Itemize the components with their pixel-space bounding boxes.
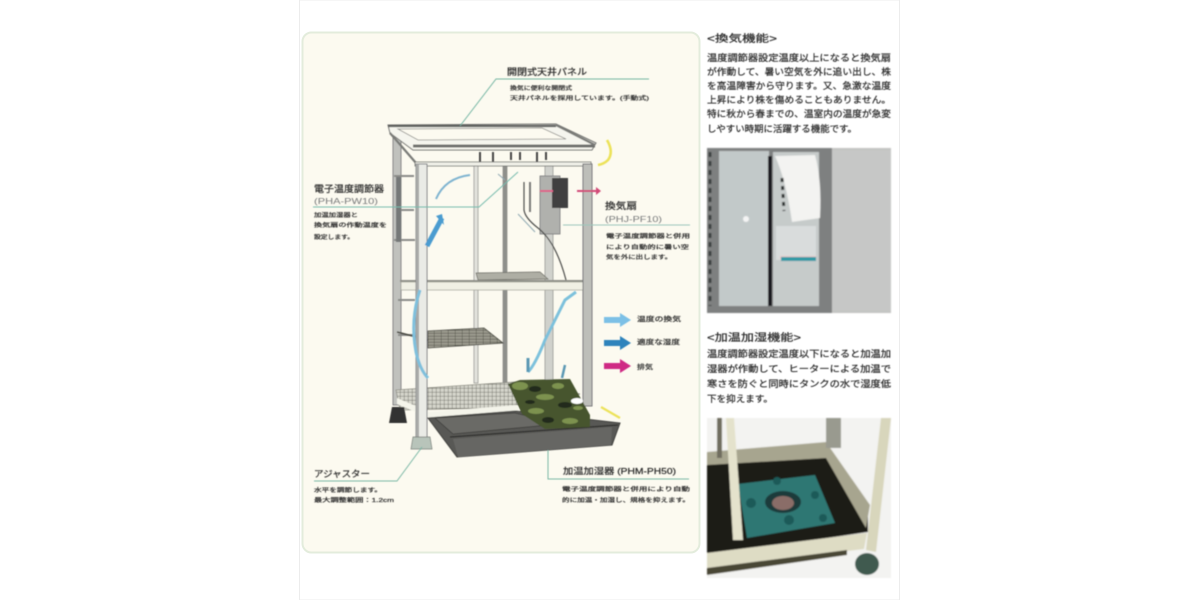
roof hinges and wiring <box>480 152 546 162</box>
legend: airflow arrows <box>604 313 682 373</box>
lower wire shelf <box>428 328 503 348</box>
text block: ventilation description: を高温障害から守ります。又、急激な温度 <box>707 80 891 91</box>
middle shelf <box>476 272 548 280</box>
legend: airflow arrows: 温度の換気 <box>637 314 682 323</box>
callout: ceiling panel: 換気に便利な開閉式 <box>510 84 573 92</box>
panel: diagram background <box>302 32 700 552</box>
callout: heater humidifier: 電子温度調節器と併用により自動 <box>562 485 691 493</box>
front adjuster foot <box>411 437 432 449</box>
side panel ribs <box>394 176 415 335</box>
callout: adjuster: 最大調整範囲：1.2cm <box>314 496 395 504</box>
callout: ventilation fan: 気を外に出します。 <box>606 253 672 261</box>
text block: heating description: 寒さを防ぐと同時にタンクの水で湿度低 <box>707 378 891 389</box>
legend: airflow arrows: 適度な湿度 <box>637 337 681 346</box>
back frame posts <box>474 165 553 383</box>
text block: ventilation description: 上昇により株を傷めることもありません。 <box>707 94 891 105</box>
text block: ventilation description: 特に秋から春までの、温室内の温度が急変 <box>707 108 891 119</box>
text block: ventilation description <box>707 52 891 134</box>
legend: airflow arrows: 排気 <box>637 362 654 371</box>
blue airflow curves <box>414 174 576 378</box>
callout: ventilation fan: により自動的に暑い空 <box>606 243 690 251</box>
callout: heater humidifier: 加温加湿器 (PHM-PH50) <box>563 466 676 476</box>
text block: heating description <box>707 348 891 404</box>
bottom mesh shelf <box>396 382 580 410</box>
tray <box>428 411 620 457</box>
callout: ventilation fan <box>605 200 690 261</box>
callout: ceiling panel: 開閉式天井パネル <box>507 66 587 77</box>
callout: ventilation fan: 電子温度調節器と併用 <box>606 232 690 240</box>
back left post <box>393 130 401 405</box>
callout: adjuster: アジャスター <box>314 469 370 479</box>
front right post <box>583 164 592 406</box>
arrow: exhaust <box>604 359 631 373</box>
callout: electronic temperature controller: (PHA-PW10) <box>314 196 378 206</box>
top front beam <box>415 162 591 166</box>
text block: heating description: 温度調節器設定温度以下になると加温加 <box>707 348 891 359</box>
ventilation fan unit <box>524 176 601 280</box>
callout: electronic temperature controller: 加温加湿器と <box>314 211 358 219</box>
heading: ventilation function: <換気機能> <box>707 32 777 45</box>
text block: ventilation description: が作動して、暑い空気を外に追い出し、株 <box>707 66 891 77</box>
callout: electronic temperature controller: 換気扇の作動温度を <box>314 221 387 229</box>
yellow lid arrows <box>598 140 611 165</box>
photo: humidifier tank <box>707 418 891 578</box>
callout: electronic temperature controller: 電子温度調節器 <box>314 183 384 194</box>
callout: ceiling panel: 天井パネルを採用しています。(手動式) <box>510 94 649 102</box>
callout: electronic temperature controller <box>314 183 387 241</box>
arrow: warm air circulation <box>604 313 631 327</box>
plants <box>508 379 590 429</box>
heading: heating and humidifying function: <加温加湿機能> <box>707 331 801 344</box>
text block: ventilation description: 温度調節器設定温度以上になると換気扇 <box>707 52 891 63</box>
callout: ventilation fan: (PHJ-PF10) <box>605 214 662 224</box>
text block: heating description: 湿器が作動して、ヒーターによる加温で <box>707 363 891 374</box>
callout: electronic temperature controller: 設定します。 <box>314 233 354 241</box>
text block: ventilation description: しやすい時期に活躍する機能です。 <box>707 123 857 134</box>
diagram: greenhouse cabinet <box>388 124 620 457</box>
callout: adjuster <box>314 469 395 504</box>
callout: heater humidifier <box>562 466 691 504</box>
leader lines <box>313 79 690 481</box>
front left post <box>416 164 427 438</box>
roof panel <box>388 124 596 150</box>
photo: ventilation fan <box>707 148 891 313</box>
callout: heater humidifier: 的に加温・加湿し、規格を抑えます。 <box>562 496 690 504</box>
callout: adjuster: 水平を調節します。 <box>314 486 382 494</box>
arrow: proper humidity <box>604 336 631 350</box>
callout: ventilation fan: 換気扇 <box>605 200 637 211</box>
callout: ceiling panel <box>507 66 649 102</box>
text block: heating description: 下を抑えます。 <box>707 393 773 404</box>
back adjuster foot <box>389 407 407 423</box>
